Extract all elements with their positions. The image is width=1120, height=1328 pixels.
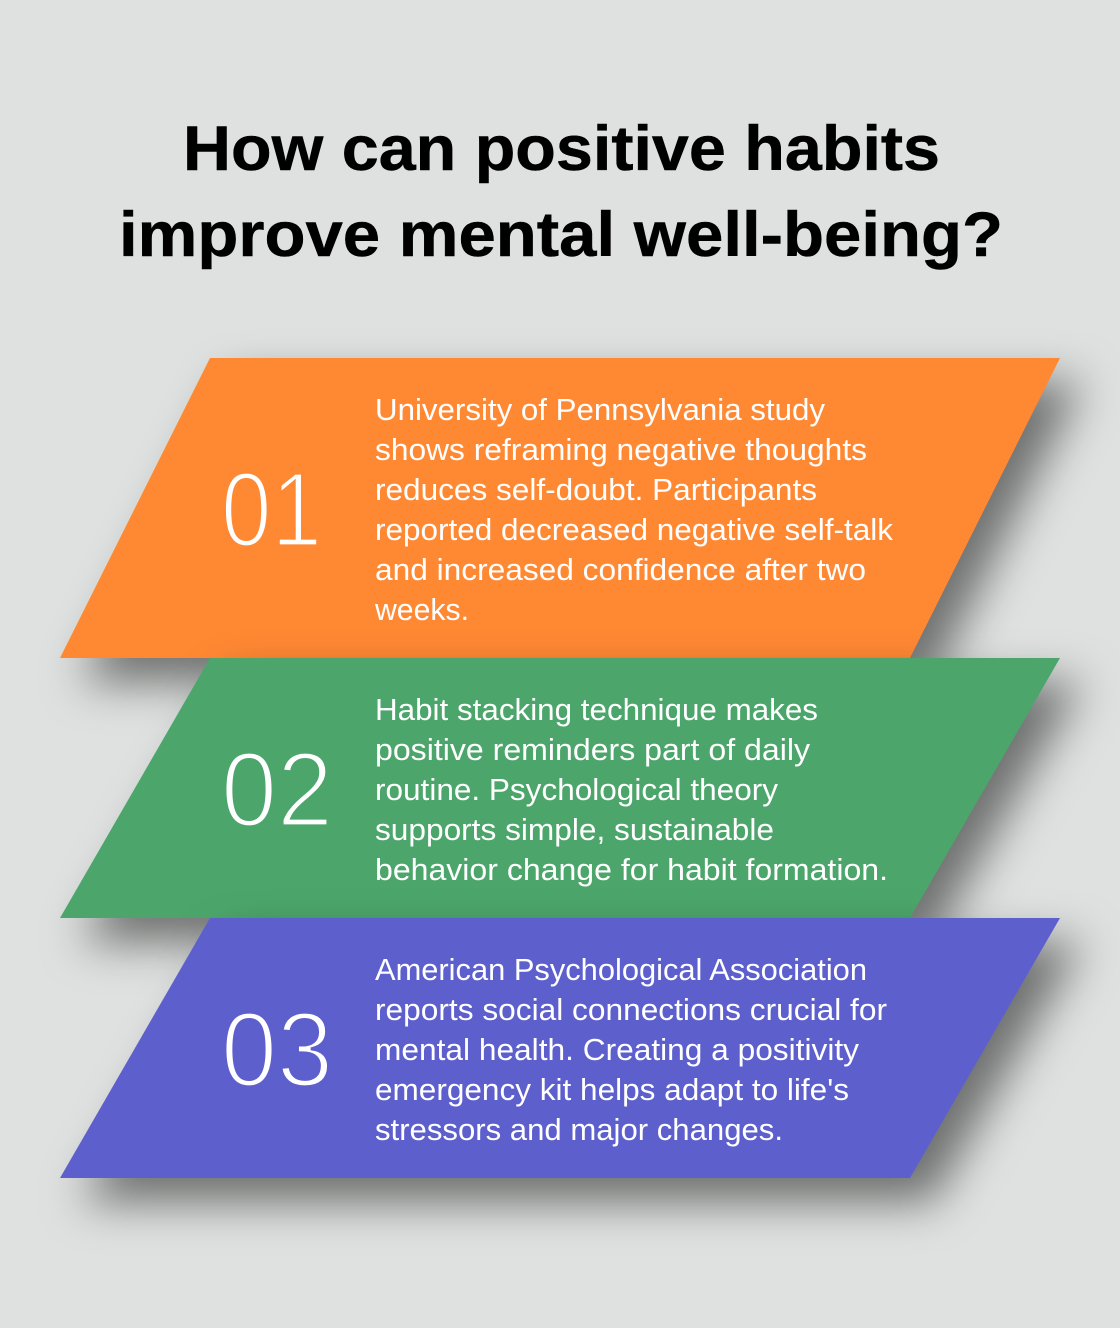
text block 02: positive reminders part of daily: [375, 732, 811, 767]
text block 01: reduces self-doubt. Participants: [375, 472, 817, 507]
text block 02: supports simple, sustainable: [375, 812, 774, 847]
title: How can positive habits: [183, 114, 940, 184]
text block 02: Habit stacking technique makes: [375, 692, 818, 727]
text block 02: routine. Psychological theory: [375, 772, 779, 807]
title: improve mental well-being?: [119, 200, 1003, 270]
text block 01: weeks.: [374, 592, 469, 627]
panel: step 03: [60, 918, 1060, 1178]
number 02: 02: [221, 731, 333, 849]
text block 02: [375, 692, 888, 887]
text block 01: and increased confidence after two: [375, 552, 866, 587]
text block 01: reported decreased negative self-talk: [375, 512, 894, 547]
text block 03: reports social connections crucial for: [375, 992, 887, 1027]
text block 03: [375, 952, 887, 1147]
green parallelogram: [60, 658, 1060, 918]
text block 03: American Psychological Association: [375, 952, 867, 987]
panel: step 01: [60, 358, 1060, 658]
panel: step 02: [60, 658, 1060, 918]
number 01: 01: [221, 451, 322, 569]
title: [119, 114, 1003, 270]
orange parallelogram: [60, 358, 1060, 658]
text block 03: mental health. Creating a positivity: [375, 1032, 860, 1067]
text block 01: [374, 392, 894, 627]
text block 03: emergency kit helps adapt to life's: [375, 1072, 849, 1107]
number 03: 03: [221, 991, 333, 1109]
purple parallelogram: [60, 918, 1060, 1178]
text block 01: University of Pennsylvania study: [375, 392, 825, 427]
text block 03: stressors and major changes.: [375, 1112, 783, 1147]
text block 02: behavior change for habit formation.: [375, 852, 888, 887]
text block 01: shows reframing negative thoughts: [375, 432, 867, 467]
